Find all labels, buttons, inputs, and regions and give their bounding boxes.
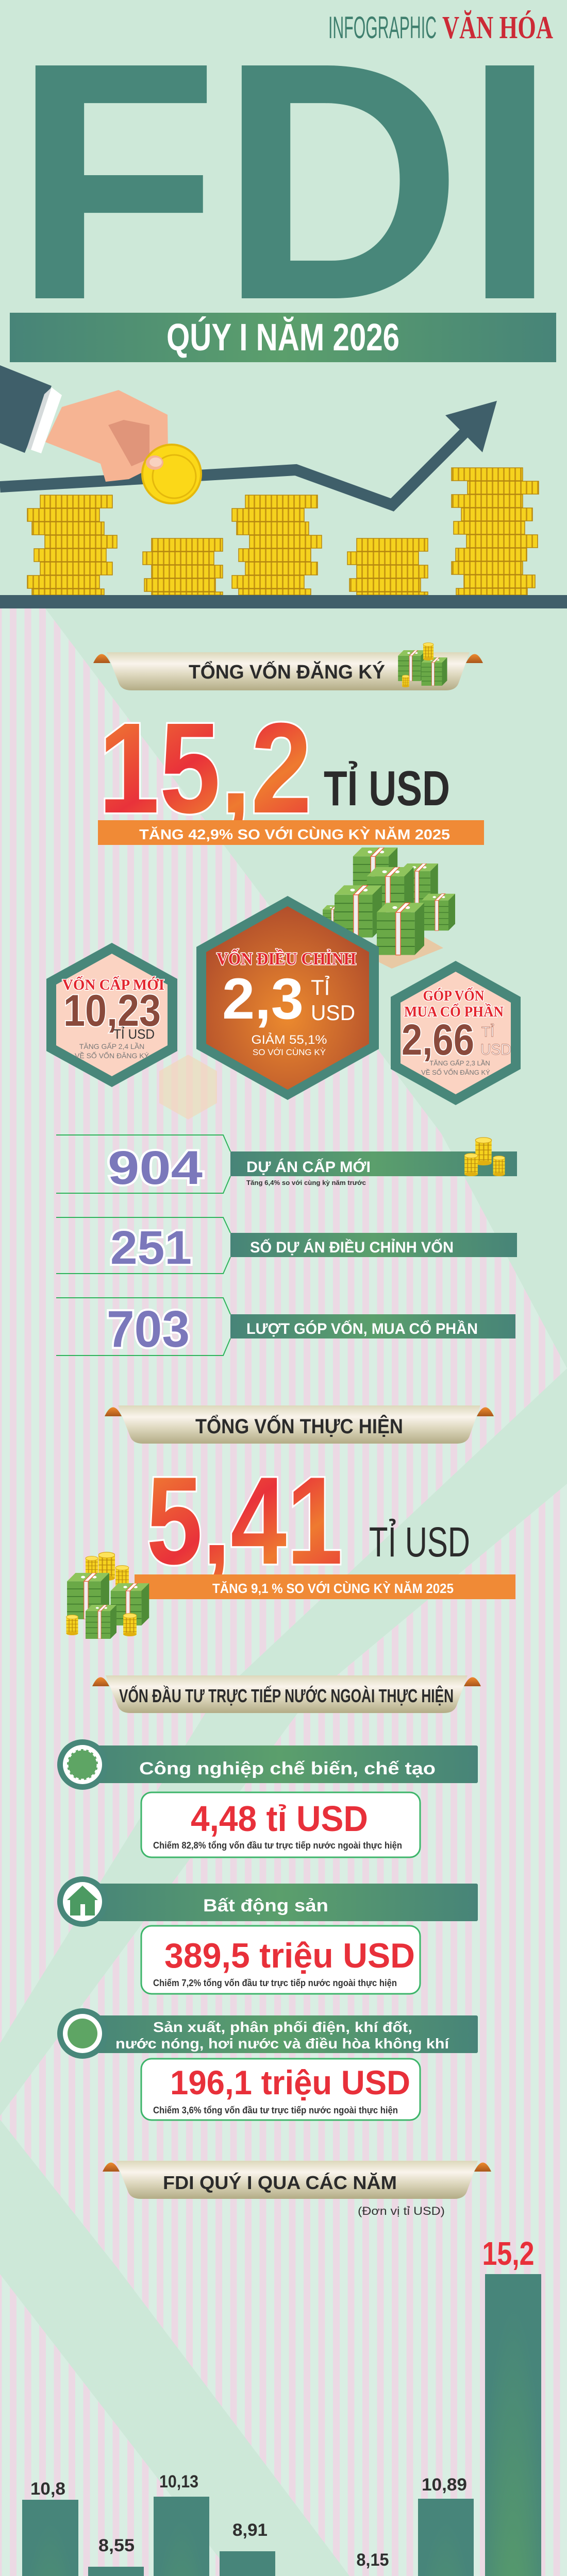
bar chart: FDI Q1 2019-2026: 10,13 (159, 2472, 198, 2492)
hexagon: vốn cấp mới: VỀ SỐ VỐN ĐĂNG KÝ (75, 1051, 149, 1060)
subtitle band: QÚY I NĂM 2026: QÚY I NĂM 2026 (166, 316, 399, 359)
hexagon: góp vốn mua cổ phần: VỀ SỐ VỐN ĐĂNG KÝ (421, 1069, 490, 1076)
sector: bất động sản: Chiếm 7,2% tổng vốn đầu tư trực tiếp nước ngoài thực hiện (153, 1978, 397, 1988)
stat row: 904 dự án cấp mới (56, 1135, 517, 1194)
stat row: 904 dự án cấp mới: Tăng 6,4% so với cùng kỳ năm trước (246, 1179, 366, 1187)
hexagon: vốn cấp mới: TĂNG GẤP 2,4 LẦN (79, 1042, 144, 1050)
stat row: 251 số dự án điều chỉnh vốn: SỐ DỰ ÁN ĐIỀU CHỈNH VỐN (250, 1239, 454, 1256)
header brand: INFOGRAPHIC (328, 10, 437, 45)
ribbon heading: TỔNG VỐN THỰC HIỆN: TỔNG VỐN THỰC HIỆN (195, 1414, 403, 1438)
sector: công nghiệp chế biến, chế tạo: 4,48 tỉ USD (191, 1799, 368, 1839)
ribbon heading: VỐN ĐẦU TƯ TRỰC TIẾP NƯỚC NGOÀI THỰC HIỆN: VỐN ĐẦU TƯ TRỰC TIẾP NƯỚC NGOÀI THỰC HIỆN (119, 1685, 454, 1706)
big number: 15,2 TỈ USD: 15,2 (98, 696, 312, 840)
growth bar: tăng 9,1% (135, 1574, 515, 1599)
sector: công nghiệp chế biến, chế tạo (57, 1739, 478, 1857)
big number: 5,41 TỈ USD: TỈ USD (369, 1518, 470, 1566)
ribbon heading: TỔNG VỐN THỰC HIỆN (105, 1405, 494, 1444)
sector: bất động sản: Bất động sản (203, 1896, 328, 1916)
ribbon heading: VỐN ĐẦU TƯ TRỰC TIẾP NƯỚC NGOÀI THỰC HIỆN (92, 1675, 481, 1713)
hexagon: vốn điều chỉnh: GIẢM 55,1% (252, 1032, 327, 1047)
ribbon heading: TỔNG VỐN ĐĂNG KÝ (93, 643, 483, 690)
big number: 15,2 TỈ USD: TỈ USD (324, 760, 450, 816)
hexagon: vốn điều chỉnh: VỐN ĐIỀU CHỈNH (216, 948, 356, 969)
bar chart: FDI Q1 2019-2026: 10,8 (30, 2479, 65, 2499)
hexagon: góp vốn mua cổ phần: TĂNG GẤP 2,3 LẦN (429, 1059, 490, 1067)
hexagon: góp vốn mua cổ phần: MUA CỔ PHẦN (404, 1004, 504, 1020)
stat row: 703 lượt góp vốn (56, 1298, 515, 1358)
hexagon: góp vốn mua cổ phần: GÓP VỐN (423, 988, 485, 1004)
subtitle band: QÚY I NĂM 2026 (10, 313, 556, 362)
stat row: 251 số dự án điều chỉnh vốn: 251 (110, 1222, 192, 1274)
hexagon: vốn điều chỉnh: TỈ (311, 975, 330, 999)
sector: điện, khí đốt, nước nóng: Chiếm 3,6% tổng vốn đầu tư trực tiếp nước ngoài thực hiện (153, 2105, 398, 2115)
icon: money and coins (66, 1552, 149, 1639)
growth bar: tăng 9,1%: TĂNG 9,1 % SO VỚI CÙNG KỲ NĂM 2025 (212, 1581, 454, 1596)
growth bar: tăng 42,9%: TĂNG 42,9% SO VỚI CÙNG KỲ NĂM 2025 (139, 826, 450, 842)
sector: công nghiệp chế biến, chế tạo: Chiếm 82,8% tổng vốn đầu tư trực tiếp nước ngoài thực hiện (153, 1840, 402, 1851)
hexagon: vốn điều chỉnh: USD (311, 1001, 355, 1025)
sector: điện, khí đốt, nước nóng: 196,1 triệu USD (170, 2063, 410, 2102)
hexagon: vốn cấp mới: TỈ USD (113, 1026, 155, 1042)
bar chart: FDI Q1 2019-2026: 8,55 (98, 2536, 135, 2555)
sector: bất động sản (57, 1876, 478, 1994)
sector: công nghiệp chế biến, chế tạo: Công nghiệp chế biến, chế tạo (139, 1759, 436, 1778)
sector: điện, khí đốt, nước nóng: Sản xuất, phân phối điện, khí đốt, (153, 2019, 412, 2035)
hexagon: góp vốn mua cổ phần: TỈ (481, 1023, 494, 1040)
unit note: (Đơn vị tỉ USD) (358, 2205, 445, 2217)
big number: 5,41 TỈ USD: 5,41 (146, 1451, 343, 1590)
icon: money pile (323, 848, 455, 969)
stat row: 904 dự án cấp mới: DỰ ÁN CẤP MỚI (246, 1158, 371, 1176)
stat row: 904 dự án cấp mới: 904 (108, 1142, 203, 1194)
stat row: 703 lượt góp vốn: 703 (107, 1300, 190, 1358)
hexagon: góp vốn mua cổ phần: USD (480, 1041, 511, 1058)
hexagon: vốn điều chỉnh (196, 896, 379, 1100)
stat row: 251 số dự án điều chỉnh vốn (56, 1217, 517, 1274)
bar chart: FDI Q1 2019-2026: 15,2 (482, 2235, 534, 2272)
illustration: hand, coins and growth arrow (0, 365, 567, 608)
hexagon: góp vốn mua cổ phần: 2,66 (402, 1015, 474, 1064)
bar chart: FDI Q1 2019-2026: 8,91 (232, 2520, 268, 2540)
hexagon: vốn điều chỉnh: 2,3 (222, 967, 304, 1031)
bar chart: FDI Q1 2019-2026 (22, 2235, 541, 2576)
hexagon: góp vốn mua cổ phần (391, 961, 521, 1105)
sector: điện, khí đốt, nước nóng (57, 2008, 478, 2120)
hexagon: vốn điều chỉnh: SO VỚI CÙNG KỲ (253, 1047, 326, 1057)
hexagon: vốn cấp mới: 10,23 (63, 986, 161, 1036)
ribbon heading: FDI QUÝ I QUA CÁC NĂM (103, 2161, 491, 2199)
stat row: 703 lượt góp vốn: LƯỢT GÓP VỐN, MUA CỔ PHẦN (246, 1320, 478, 1337)
sector: bất động sản: 389,5 triệu USD (164, 1936, 415, 1975)
bar chart: FDI Q1 2019-2026: 8,15 (357, 2550, 389, 2570)
title: FDI: FDI (13, 0, 557, 370)
ribbon heading: TỔNG VỐN ĐĂNG KÝ: TỔNG VỐN ĐĂNG KÝ (189, 660, 385, 683)
bar chart: FDI Q1 2019-2026: 10,89 (422, 2475, 467, 2495)
ribbon heading: FDI QUÝ I QUA CÁC NĂM: FDI QUÝ I QUA CÁC NĂM (163, 2172, 397, 2193)
hexagon: vốn cấp mới (46, 943, 177, 1087)
sector: điện, khí đốt, nước nóng: nước nóng, hơi nước và điều hòa không khí (115, 2036, 449, 2052)
hexagon: vốn cấp mới: VỐN CẤP MỚI (62, 976, 164, 993)
growth bar: tăng 42,9% (98, 820, 484, 845)
